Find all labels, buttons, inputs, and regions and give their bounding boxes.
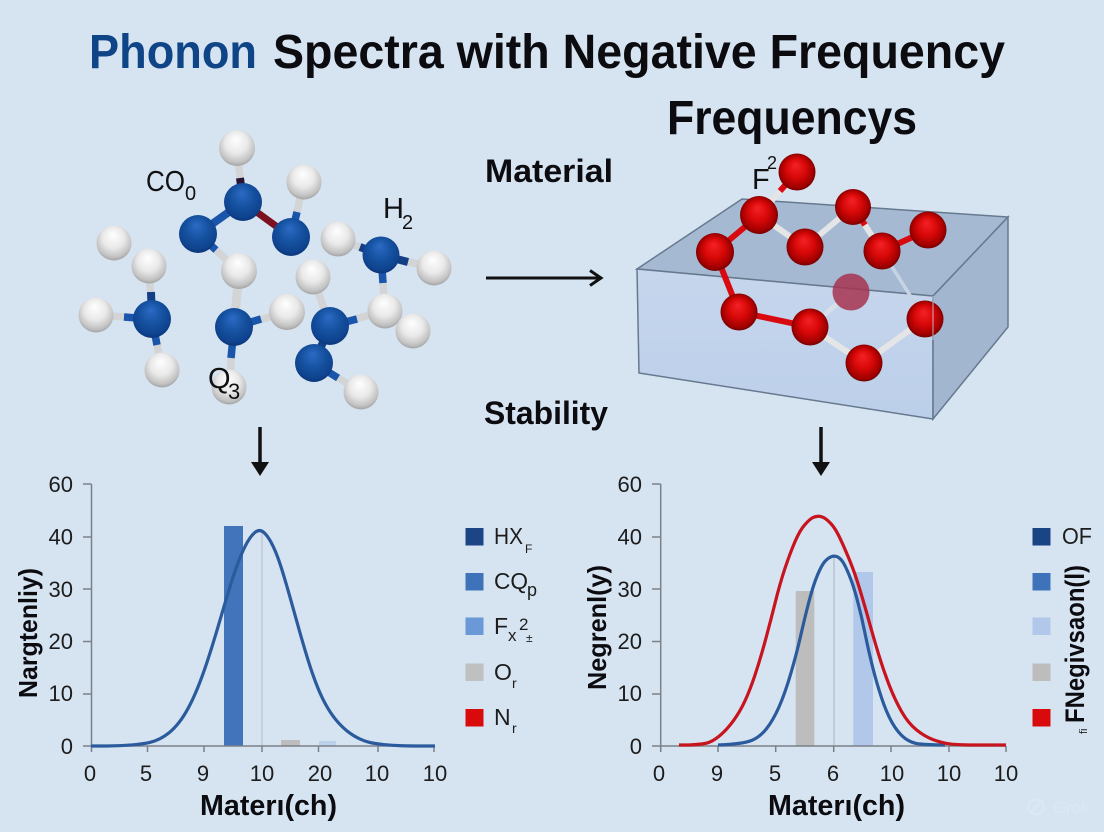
left legend: O [494,659,512,685]
right chart x tick labels: 5 [769,761,781,786]
left chart x tick labels: 0 [84,761,96,786]
white atoms [78,130,452,410]
right chart y tick labels: 0 [630,734,642,759]
molecule label: H2: H [383,193,404,225]
left chart x tick labels: 10 [365,761,389,786]
right chart x tick labels: 9 [711,761,723,786]
right chart y axis title: Negrenl(y) [582,565,612,690]
left chart y tick labels [49,472,73,759]
left legend: F [494,613,508,639]
left chart bars [224,526,336,746]
right chart x tick labels: 10 [937,761,961,786]
red atom bonds [715,172,928,363]
molecule illustration: blue and white atoms [78,130,452,410]
left chart x tick labels: 20 [308,761,332,786]
left chart y tick labels: 60 [49,472,73,497]
left legend: CQ [494,568,528,594]
arrow: crystal down to chart [812,427,830,476]
right chart x tick labels: 10 [880,761,904,786]
left legend: HX [494,523,523,549]
left legend: N [494,704,511,730]
right chart axes [652,484,1006,752]
watermark [1028,798,1090,817]
faded atom inside slab [832,274,870,310]
left legend: 2 [519,615,528,634]
right chart x tick labels: 10 [994,761,1018,786]
left chart [13,472,447,822]
left chart x tick labels [84,761,447,786]
right chart x tick labels [653,761,1018,786]
title: Spectra with Negative Frequency [273,26,1005,79]
left chart curve [91,531,435,746]
title: Phonon [89,26,257,79]
blue atoms [133,183,400,382]
arrow: molecule down to chart [251,427,269,476]
molecule label: CO0: CO [146,166,185,198]
left chart axes [83,484,435,752]
right chart x tick labels: 0 [653,761,665,786]
left legend: F [525,542,532,556]
left chart y axis title: Nargtenliy) [13,568,43,698]
left chart y tick labels: 20 [49,629,73,654]
right chart red curve [679,516,1006,745]
right legend [1032,523,1092,734]
right legend: fi [1078,728,1090,734]
rotated legend label: FNegivsaon(l) [1060,565,1090,723]
right legend: OF [1062,523,1092,549]
molecule label: H2 [383,193,413,234]
left legend: r [512,675,517,691]
title second line: Frequencys [667,92,917,145]
crystal label: F2: 2 [767,153,777,173]
crystal slab with red atoms [637,154,1008,419]
left chart x tick labels: 10 [250,761,274,786]
molecule label: Q3: Q [208,363,231,395]
left chart x axis title: Materı(ch) [200,790,337,822]
right chart x tick labels: 6 [827,761,839,786]
right chart y tick labels [618,472,642,759]
right chart bars [796,557,873,746]
watermark: Grok [1053,798,1090,817]
molecule label: Q3: 3 [228,379,240,404]
arrow: molecule to crystal [486,270,601,286]
right chart y tick labels: 30 [618,577,642,602]
left chart x tick labels: 9 [197,761,209,786]
molecule label: Q3 [208,363,240,404]
left chart y tick labels: 10 [49,681,73,706]
right chart y tick labels: 20 [618,629,642,654]
left chart x tick labels: 5 [140,761,152,786]
right chart y tick labels: 10 [618,681,642,706]
left chart x tick labels: 10 [423,761,447,786]
right chart y tick labels: 40 [618,524,642,550]
red atoms [696,154,946,382]
molecule label: CO0: 0 [185,183,196,205]
crystal label: F2: F [752,164,770,196]
left legend [466,523,537,736]
right chart y tick labels: 60 [618,472,642,497]
right chart [582,472,1018,822]
heading: Stability: Stability [484,395,608,431]
right chart x axis title: Materı(ch) [768,790,905,822]
heading: Material: Material [485,153,613,189]
right chart blue curve [718,556,945,745]
left chart y tick labels: 40 [49,524,73,550]
left legend: x [508,626,517,645]
left chart y tick labels: 0 [61,734,73,759]
left chart y tick labels: 30 [49,577,73,602]
left legend: r [512,720,517,736]
molecule label: H2: 2 [402,212,413,234]
left legend: p [527,580,537,600]
crystal label: F2 [752,153,777,196]
left legend: ± [526,631,533,645]
